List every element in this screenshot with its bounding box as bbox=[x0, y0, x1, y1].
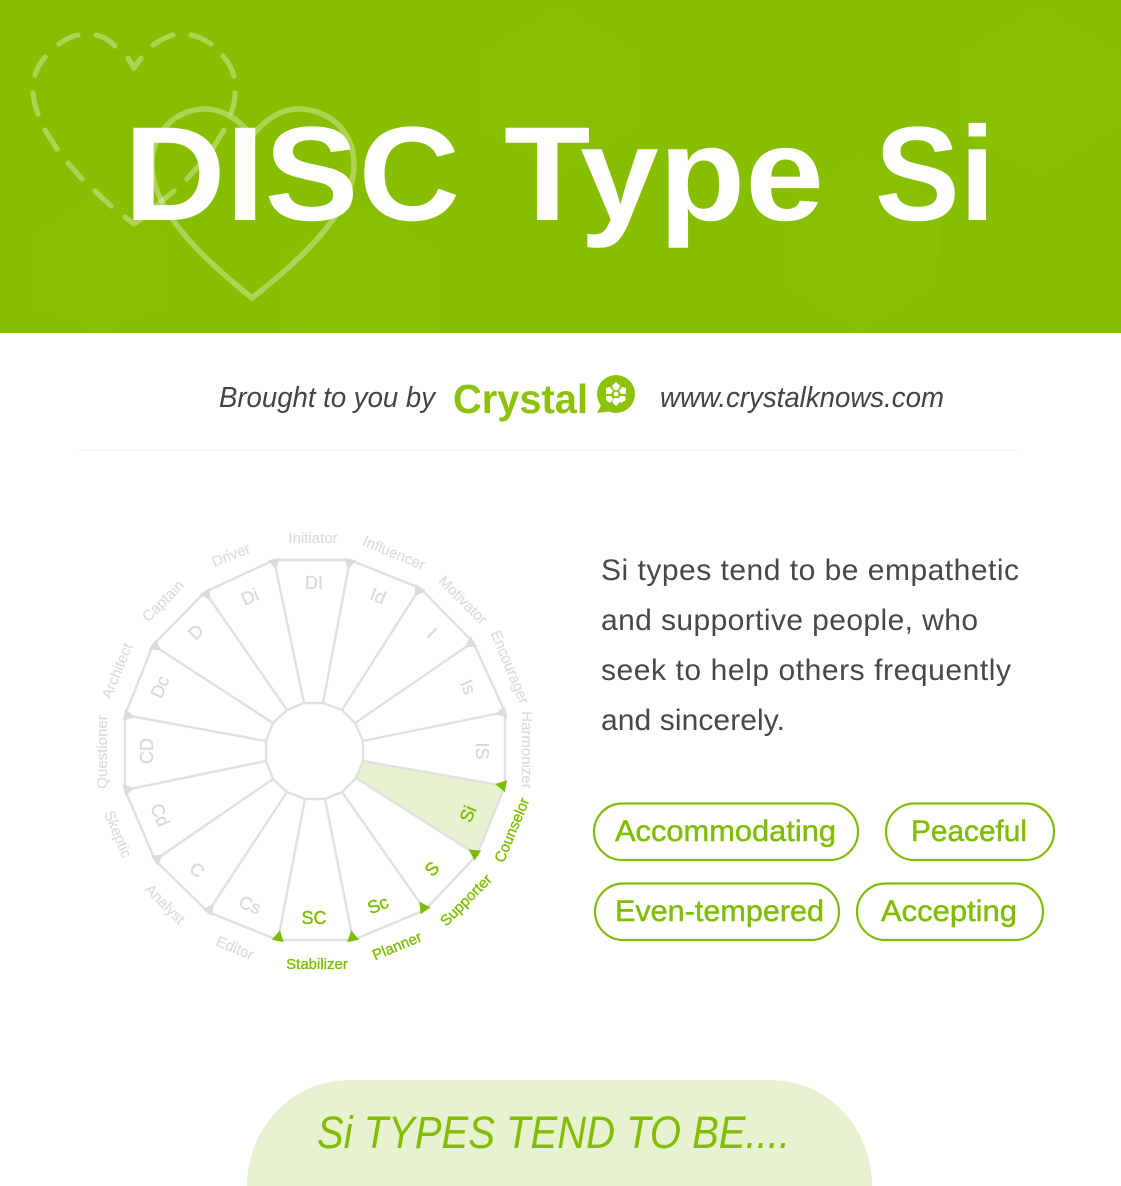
panel: green header banner bbox=[0, 0, 1121, 333]
section heading tab bbox=[247, 1080, 872, 1186]
sector labels: Cd bbox=[146, 801, 174, 829]
pill: Peaceful bbox=[886, 804, 1054, 860]
sector labels: Sc bbox=[364, 892, 392, 918]
outer type labels: Driver bbox=[209, 540, 253, 571]
icon: solid heart outline bbox=[152, 109, 354, 298]
outer type labels: Influencer bbox=[360, 533, 427, 574]
text: website url: www.crystalknows.com bbox=[660, 382, 944, 414]
vertex markers: grey bbox=[123, 558, 507, 916]
title bbox=[124, 100, 995, 249]
outer type labels: Captain bbox=[139, 577, 188, 626]
text block: description: and sincerely. bbox=[601, 704, 785, 737]
sector labels: Si bbox=[456, 803, 480, 825]
outer type labels: Editor bbox=[213, 933, 256, 964]
outer type labels: Encourager bbox=[487, 628, 532, 706]
sector labels: SC bbox=[301, 908, 327, 928]
outer type labels: Analyst bbox=[141, 881, 189, 928]
trait pills bbox=[594, 804, 1054, 940]
vertex markers: green bbox=[272, 778, 507, 942]
pill: Peaceful: Peaceful bbox=[911, 815, 1027, 848]
outer type labels bbox=[94, 530, 535, 973]
outer type labels: Architect bbox=[98, 640, 137, 701]
title: Si bbox=[875, 100, 995, 249]
text block: description bbox=[601, 554, 1019, 737]
pill: Even-tempered: Even-tempered bbox=[615, 895, 824, 928]
sector labels: CD bbox=[137, 738, 157, 764]
text block: description: seek to help others frequently bbox=[601, 654, 1011, 687]
sector labels: Id bbox=[367, 584, 389, 608]
title: DISC bbox=[124, 100, 460, 249]
outer type labels: Questioner bbox=[94, 715, 111, 789]
sector labels bbox=[137, 573, 492, 928]
chart: DISC wheel bbox=[94, 530, 535, 973]
logo: Crystal: Crystal bbox=[453, 376, 588, 422]
sector labels: DI bbox=[305, 573, 323, 593]
sector labels: Dc bbox=[147, 673, 173, 701]
title: Type bbox=[504, 100, 824, 249]
sector labels: I bbox=[423, 624, 441, 642]
pill: Accepting: Accepting bbox=[881, 895, 1017, 928]
icon: Crystal speech bubble flower bbox=[597, 375, 635, 413]
pill: Even-tempered bbox=[595, 884, 839, 940]
outer type labels: Counselor bbox=[492, 795, 533, 865]
sector labels: D bbox=[184, 620, 208, 644]
outer type labels: Skeptic bbox=[100, 808, 135, 861]
outer type labels: Initiator bbox=[288, 530, 338, 547]
sector labels: Di bbox=[238, 585, 262, 609]
text block: description: and supportive people, who bbox=[601, 604, 978, 637]
outer type labels: Stabilizer bbox=[286, 956, 348, 973]
sector labels: Cs bbox=[236, 892, 264, 918]
pill: Accommodating bbox=[594, 804, 858, 860]
text: brought to you by: Brought to you by bbox=[219, 382, 436, 414]
sector labels: C bbox=[185, 858, 209, 882]
highlighted sector: Si bbox=[356, 761, 505, 855]
sector labels: Is bbox=[456, 677, 480, 697]
outer type labels: Harmonizer bbox=[518, 711, 535, 789]
outer type labels: Supporter bbox=[437, 871, 496, 930]
sector labels: S bbox=[421, 858, 443, 880]
pill: Accommodating: Accommodating bbox=[615, 815, 836, 848]
text block: description: Si types tend to be empathetic bbox=[601, 554, 1019, 587]
icon: dashed heart outline bbox=[33, 35, 235, 224]
sector labels: IS bbox=[472, 742, 492, 760]
outer type labels: Planner bbox=[370, 929, 424, 964]
outer type labels: Motivator bbox=[435, 573, 490, 628]
pill: Accepting bbox=[857, 884, 1043, 940]
section heading tab: Si TYPES TEND TO BE.... bbox=[317, 1107, 790, 1158]
